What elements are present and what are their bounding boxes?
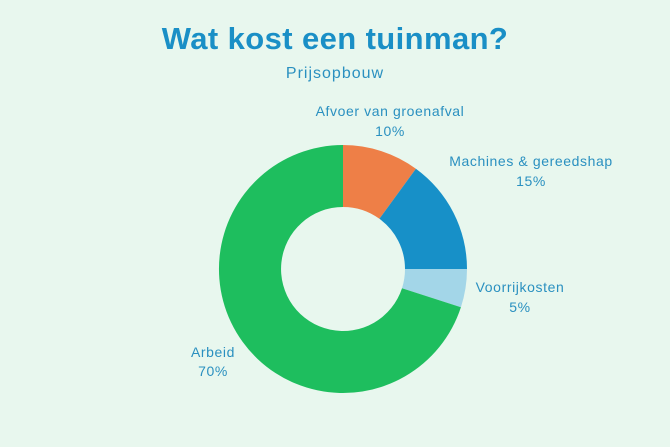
labels xyxy=(191,103,613,379)
label: Afvoer: Afvoer van groenafval xyxy=(316,103,464,119)
title: Wat kost een tuinman? xyxy=(162,21,508,56)
slice: Voorrijkosten 5% xyxy=(402,269,467,307)
slice: Arbeid 70% xyxy=(219,145,461,393)
label: Arbeid: 70% xyxy=(198,363,228,379)
label: Machines: Machines & gereedshap xyxy=(449,153,613,169)
label: Machines xyxy=(449,153,613,189)
label: Afvoer xyxy=(316,103,464,139)
label: Arbeid xyxy=(191,344,235,379)
label: Voorrijkosten: Voorrijkosten xyxy=(476,279,564,295)
slice: Afvoer van groenafval 10% xyxy=(343,145,416,219)
subtitle: Prijsopbouw xyxy=(286,65,384,82)
label: Afvoer: 10% xyxy=(375,123,405,139)
slice: Machines & gereedshap 15% xyxy=(379,169,467,269)
label: Voorrijkosten xyxy=(476,279,564,315)
label: Voorrijkosten: 5% xyxy=(509,299,531,315)
label: Machines: 15% xyxy=(516,173,546,189)
label: Arbeid: Arbeid xyxy=(191,344,235,360)
